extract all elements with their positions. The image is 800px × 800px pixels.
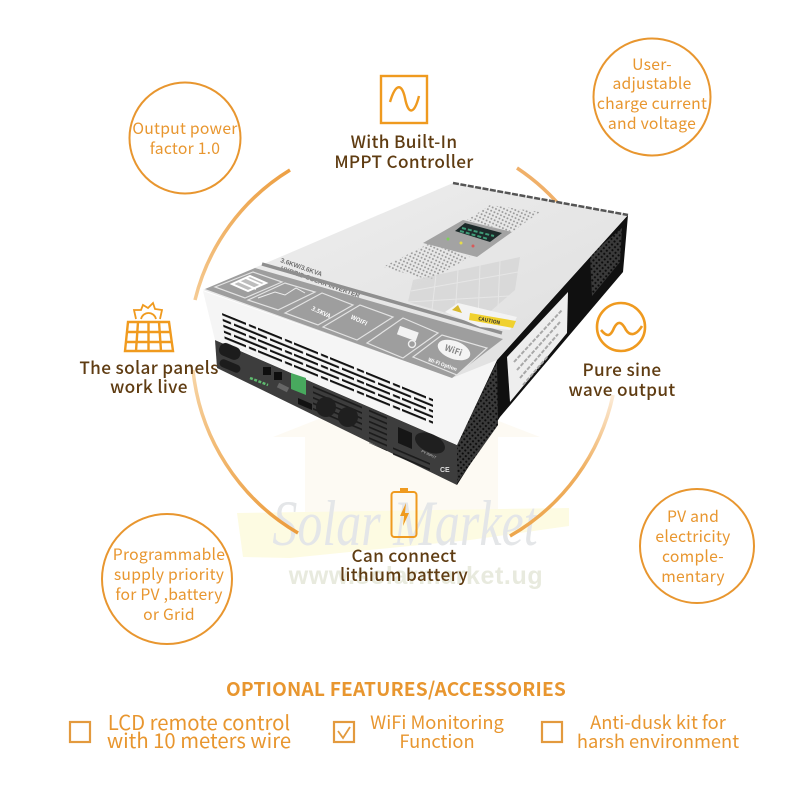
option: WiFi monitoring: Function [399,728,475,754]
circle: PV and electricity: comple- [662,544,724,567]
option: LCD remote control [70,706,291,754]
tile icons: WiFi [443,342,464,359]
circle: charge current: and voltage [608,111,696,134]
LCD control panel [423,220,512,257]
option: anti-dusk kit: Anti-dusk kit for [590,709,727,735]
circle: supply priority: or Grid [143,602,195,625]
circle: PV and electricity: mentary [661,564,725,587]
feature: pure sine wave [569,303,675,401]
circle: supply priority: supply priority [114,562,224,585]
feature: pure sine wave: Pure sine [582,356,662,381]
feature: solar panels: work live [110,373,188,398]
tile icons: WOIFI [349,312,369,327]
top face [203,183,628,378]
inverter right side [457,215,628,485]
feature: lithium battery: lithium battery [340,561,468,586]
central ring: right arcs [510,168,613,536]
rear connection panel: PV INPUT [421,449,438,460]
dotted speaker mesh [383,205,540,280]
option: WiFi monitoring: WiFi Monitoring [370,709,505,735]
feature band [205,268,503,378]
circle: supply priority [102,514,232,644]
central ring: left arc [193,170,298,533]
tile icons: 3.5KVA [310,304,333,320]
icon: sine wave square [381,76,427,123]
grey stripe above feature band [262,264,502,333]
side mesh [457,228,622,483]
feature: solar panels: The solar panels [79,354,219,379]
side rating label [507,292,568,402]
circle: output power factor: Output power [132,116,238,139]
feature: solar panels [79,303,219,398]
optional features heading: OPTIONAL FEATURES/ACCESSORIES [226,674,566,702]
icon: sine wave circle [597,303,645,351]
vent slots [222,313,433,426]
watermark: house and Solar Market logo [237,385,569,590]
caution sticker: CAUTION [478,315,501,327]
product title on top face: HYBRID SOLAR INVERTER [279,265,361,300]
front dark panel [215,340,457,485]
watermark: house and Solar Market logo: Solar Market [272,487,539,560]
option: LCD remote control: LCD remote control [108,706,290,736]
circle: charge current: charge current [597,91,707,114]
front white panel [203,291,497,445]
product title on top face: 3.6KW/3.6KVA [279,257,323,278]
icon: solar panel with sun [125,303,173,351]
circle: supply priority: Programmable [113,542,225,565]
watermark: house and Solar Market logo: www.solarmarket.ug [288,562,543,590]
feature: lithium battery: Can connect [351,542,457,567]
circle: charge current [594,38,710,156]
caution sticker [445,303,517,330]
rear connection panel: CE [440,467,450,474]
circle: supply priority: for PV ,battery [115,582,223,605]
circle: charge current: User- [632,52,672,75]
feature: pure sine wave: wave output [569,376,675,401]
feature: MPPT controller [334,76,474,173]
circle: charge current: adjustable [612,71,692,94]
feature: MPPT controller: MPPT Controller [334,148,474,173]
option: anti-dusk kit: harsh environment [577,728,739,754]
feature: lithium battery [340,488,468,586]
circle: PV and electricity [640,489,754,603]
top rear edge [453,183,628,215]
feature band tiles [215,272,487,375]
option: WiFi monitoring [334,709,505,754]
option: anti-dusk kit [542,709,739,754]
circle: output power factor [130,82,240,194]
icon: battery with bolt [392,488,416,537]
inverter product [203,183,628,485]
circle: PV and electricity: PV and [667,504,719,527]
circle: PV and electricity: electricity [655,524,731,547]
tile icons: Wi-Fi Option [427,356,458,373]
option: LCD remote control: with 10 meters wire [107,724,291,754]
ghost solar panel graphic [408,257,520,322]
tile icons [232,276,473,373]
feature: MPPT controller: With Built-In [351,128,457,153]
circle: output power factor: factor 1.0 [150,136,220,159]
rear connection panel [217,341,450,474]
